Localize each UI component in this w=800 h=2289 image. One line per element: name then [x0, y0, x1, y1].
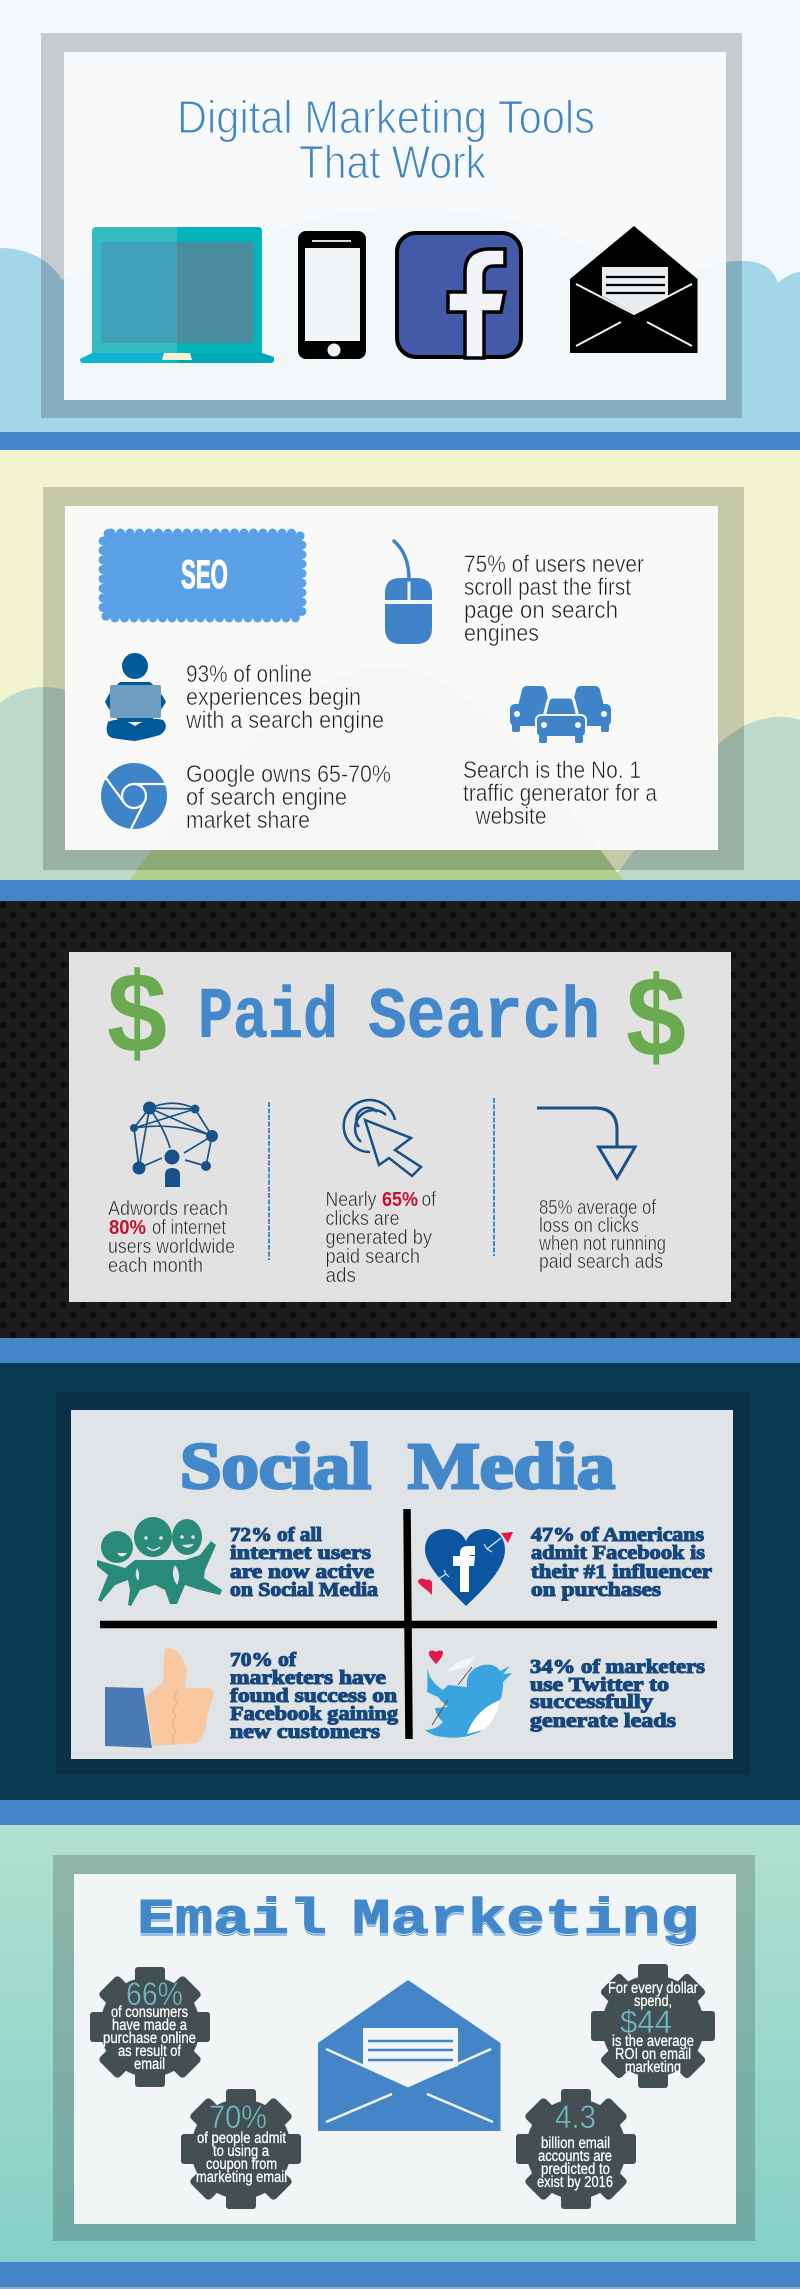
- icon: kids: [97, 1517, 222, 1606]
- panel: [64, 52, 726, 400]
- text: Nearly 65%: [326, 1189, 436, 1287]
- gear: $44: is the average: [612, 2033, 694, 2050]
- gear: 66%: [90, 1967, 210, 2087]
- icon: phone: [298, 231, 366, 359]
- icon: network: [130, 1102, 218, 1187]
- text: 72%: on Social Media: [230, 1580, 378, 1601]
- icon: thumbs up: [105, 1648, 213, 1748]
- text: Nearly 65%: generated by: [326, 1227, 432, 1249]
- gear: 70%: coupon from: [206, 2156, 277, 2173]
- panel: [69, 952, 731, 1302]
- text: 72%: 72% of all: [230, 1525, 323, 1546]
- gear: 66%: of consumers: [111, 2004, 188, 2021]
- section: paid search: [0, 901, 800, 1338]
- icon: dollar right: $: [626, 954, 686, 1081]
- text: Adwords: users worldwide: [108, 1236, 235, 1258]
- gear: 4.3: predicted to: [541, 2161, 610, 2178]
- text: 70%: Facebook gaining: [230, 1704, 398, 1725]
- text: 47%: 47% of Americans: [531, 1525, 704, 1546]
- frame: [41, 33, 742, 418]
- gear: 66%: email: [134, 2056, 165, 2073]
- gear: $44: [591, 1964, 715, 2088]
- text: 93% of online: experiences begin: [186, 684, 361, 711]
- text: Nearly 65%: of: [422, 1189, 436, 1211]
- title: Digital Marketing Tools: [177, 91, 595, 143]
- heading: [137, 1892, 699, 1949]
- divider: [268, 1102, 270, 1260]
- heading: Paid: [198, 977, 338, 1059]
- heading: [180, 1430, 615, 1503]
- title: [177, 91, 595, 188]
- band: [0, 1338, 800, 1363]
- icon: person with laptop: [105, 653, 166, 741]
- gear: $44: For every dollar: [608, 1980, 698, 1997]
- icon: click cursor: [344, 1100, 421, 1176]
- section: email marketing: [0, 1825, 800, 2262]
- heading: [198, 977, 600, 1059]
- gear: $44: ROI on email: [615, 2046, 691, 2063]
- gear: 4.3: accounts are: [538, 2148, 612, 2165]
- text: 75% of users: [464, 551, 644, 647]
- text: Search is the No. 1: Search is the No. 1: [463, 757, 641, 784]
- icon: SEO badge: SEO: [181, 553, 228, 597]
- text: Search is the No. 1: website: [475, 803, 546, 830]
- gear: 70%: [181, 2089, 301, 2209]
- text: Adwords: of internet: [152, 1217, 226, 1239]
- section: SEO: [0, 450, 800, 880]
- icon: cars: [510, 686, 611, 743]
- text: Nearly 65%: ads: [326, 1265, 356, 1287]
- text: 34%: 34% of marketers: [530, 1657, 705, 1678]
- heading: Social: [180, 1430, 371, 1503]
- gear: 4.3: 4.3: [555, 2099, 596, 2135]
- frame: [56, 1392, 751, 1775]
- cloud background: [0, 209, 800, 432]
- gear: 70%: of people admit: [197, 2130, 287, 2147]
- icon: blue envelope: [318, 1980, 500, 2131]
- icon: black envelope: [570, 226, 698, 353]
- gear: 4.3: billion email: [541, 2135, 610, 2152]
- text: 75% of users: engines: [464, 620, 539, 647]
- text: Adwords: Adwords reach: [108, 1198, 228, 1220]
- icon: twitter bird: [425, 1650, 512, 1738]
- icon: facebook: [397, 233, 521, 358]
- text: Adwords: each month: [108, 1255, 203, 1277]
- band: [0, 880, 800, 901]
- text: Nearly 65%: Nearly: [326, 1189, 376, 1211]
- text: 47%: on purchases: [531, 1580, 661, 1601]
- text: 75% of users: scroll past the first: [464, 574, 631, 601]
- divider cross: [100, 1509, 717, 1739]
- text: 93% of online: with a search engine: [185, 707, 384, 734]
- band: [0, 1800, 800, 1825]
- gear: 70%: marketing email: [196, 2169, 287, 2186]
- text: 34%: use Twitter to: [530, 1675, 669, 1696]
- text: Adwords: 80%: [109, 1217, 146, 1239]
- text: 70%: marketers have: [230, 1668, 386, 1689]
- icon: chrome: [101, 763, 167, 829]
- text: 85% average: paid search ads: [539, 1251, 663, 1273]
- title: That Work: [299, 136, 487, 188]
- text: Google owns: Google owns 65-70%: [186, 761, 391, 788]
- icon: laptop: [80, 227, 274, 363]
- text: 72%: are now active: [230, 1562, 374, 1583]
- frame: [43, 487, 744, 870]
- panel: [71, 1410, 733, 1759]
- text: 85% average: loss on clicks: [539, 1215, 639, 1237]
- text: 34%: [530, 1657, 705, 1732]
- text: 47%: admit Facebook is: [531, 1543, 705, 1564]
- text: Nearly 65%: clicks are: [326, 1208, 400, 1230]
- gear: $44: spend,: [634, 1993, 672, 2010]
- band: [0, 432, 800, 450]
- gear: 66%: 66%: [126, 1976, 183, 2012]
- text: 75% of users: 75% of users never: [464, 551, 644, 578]
- band: [0, 2262, 800, 2287]
- text: 70%: found success on: [230, 1686, 397, 1707]
- center hill: [130, 667, 623, 880]
- frame: [53, 1855, 755, 2241]
- icon: SEO badge: [103, 533, 302, 618]
- hill background: [0, 687, 800, 880]
- icon: mouse: [385, 541, 432, 644]
- text: 85% average: [538, 1197, 666, 1273]
- heading: Media: [408, 1430, 615, 1503]
- text: Nearly 65%: paid search: [326, 1246, 420, 1268]
- text: Google owns: market share: [186, 807, 310, 834]
- text: 70%: 70% of: [230, 1650, 297, 1671]
- icon: facebook heart: [418, 1529, 513, 1606]
- text: 70%: new customers: [230, 1722, 380, 1743]
- text: Adwords: [108, 1198, 235, 1277]
- text: 75% of users: page on search: [464, 597, 618, 624]
- gear: 66%: purchase online: [103, 2030, 196, 2047]
- text: 85% average: when not running: [538, 1233, 666, 1255]
- icon: down arrow: [537, 1108, 635, 1178]
- text: 72%: internet users: [230, 1543, 371, 1564]
- heading: Email: [137, 1892, 327, 1949]
- gear: 4.3: exist by 2016: [537, 2174, 613, 2191]
- text: 85% average: 85% average of: [539, 1197, 656, 1219]
- panel: [74, 1874, 736, 2224]
- text: 93% of online: [185, 661, 384, 734]
- gear: 66%: have made a: [112, 2017, 187, 2034]
- text: 70%: [230, 1650, 398, 1743]
- panel: [65, 506, 718, 850]
- section: intro: [0, 0, 800, 432]
- text: Nearly 65%: 65%: [382, 1189, 418, 1211]
- gear: 66%: as result of: [118, 2043, 182, 2060]
- icon: dollar left: $: [107, 950, 167, 1077]
- text: 34%: generate leads: [530, 1711, 677, 1732]
- text: Google owns: of search engine: [186, 784, 347, 811]
- text: 72%: [230, 1525, 378, 1601]
- section: social media: [0, 1363, 800, 1800]
- text: 34%: successfully: [530, 1692, 653, 1713]
- text: Search is the No. 1: [463, 757, 658, 830]
- gear: 70%: 70%: [209, 2099, 267, 2135]
- gear: 4.3: [516, 2089, 636, 2209]
- text: 47%: their #1 influencer: [531, 1562, 712, 1583]
- text: Google owns: [186, 761, 391, 834]
- text: 47%: [531, 1525, 712, 1601]
- gear: $44: marketing: [625, 2059, 681, 2076]
- divider: [493, 1098, 495, 1256]
- text: Search is the No. 1: traffic generator for a: [463, 780, 658, 807]
- text: 93% of online: 93% of online: [186, 661, 312, 688]
- gear: 70%: to using a: [213, 2143, 269, 2160]
- heading: Search: [368, 977, 600, 1059]
- heading: Marketing: [352, 1892, 699, 1949]
- gear: $44: $44: [620, 2004, 672, 2040]
